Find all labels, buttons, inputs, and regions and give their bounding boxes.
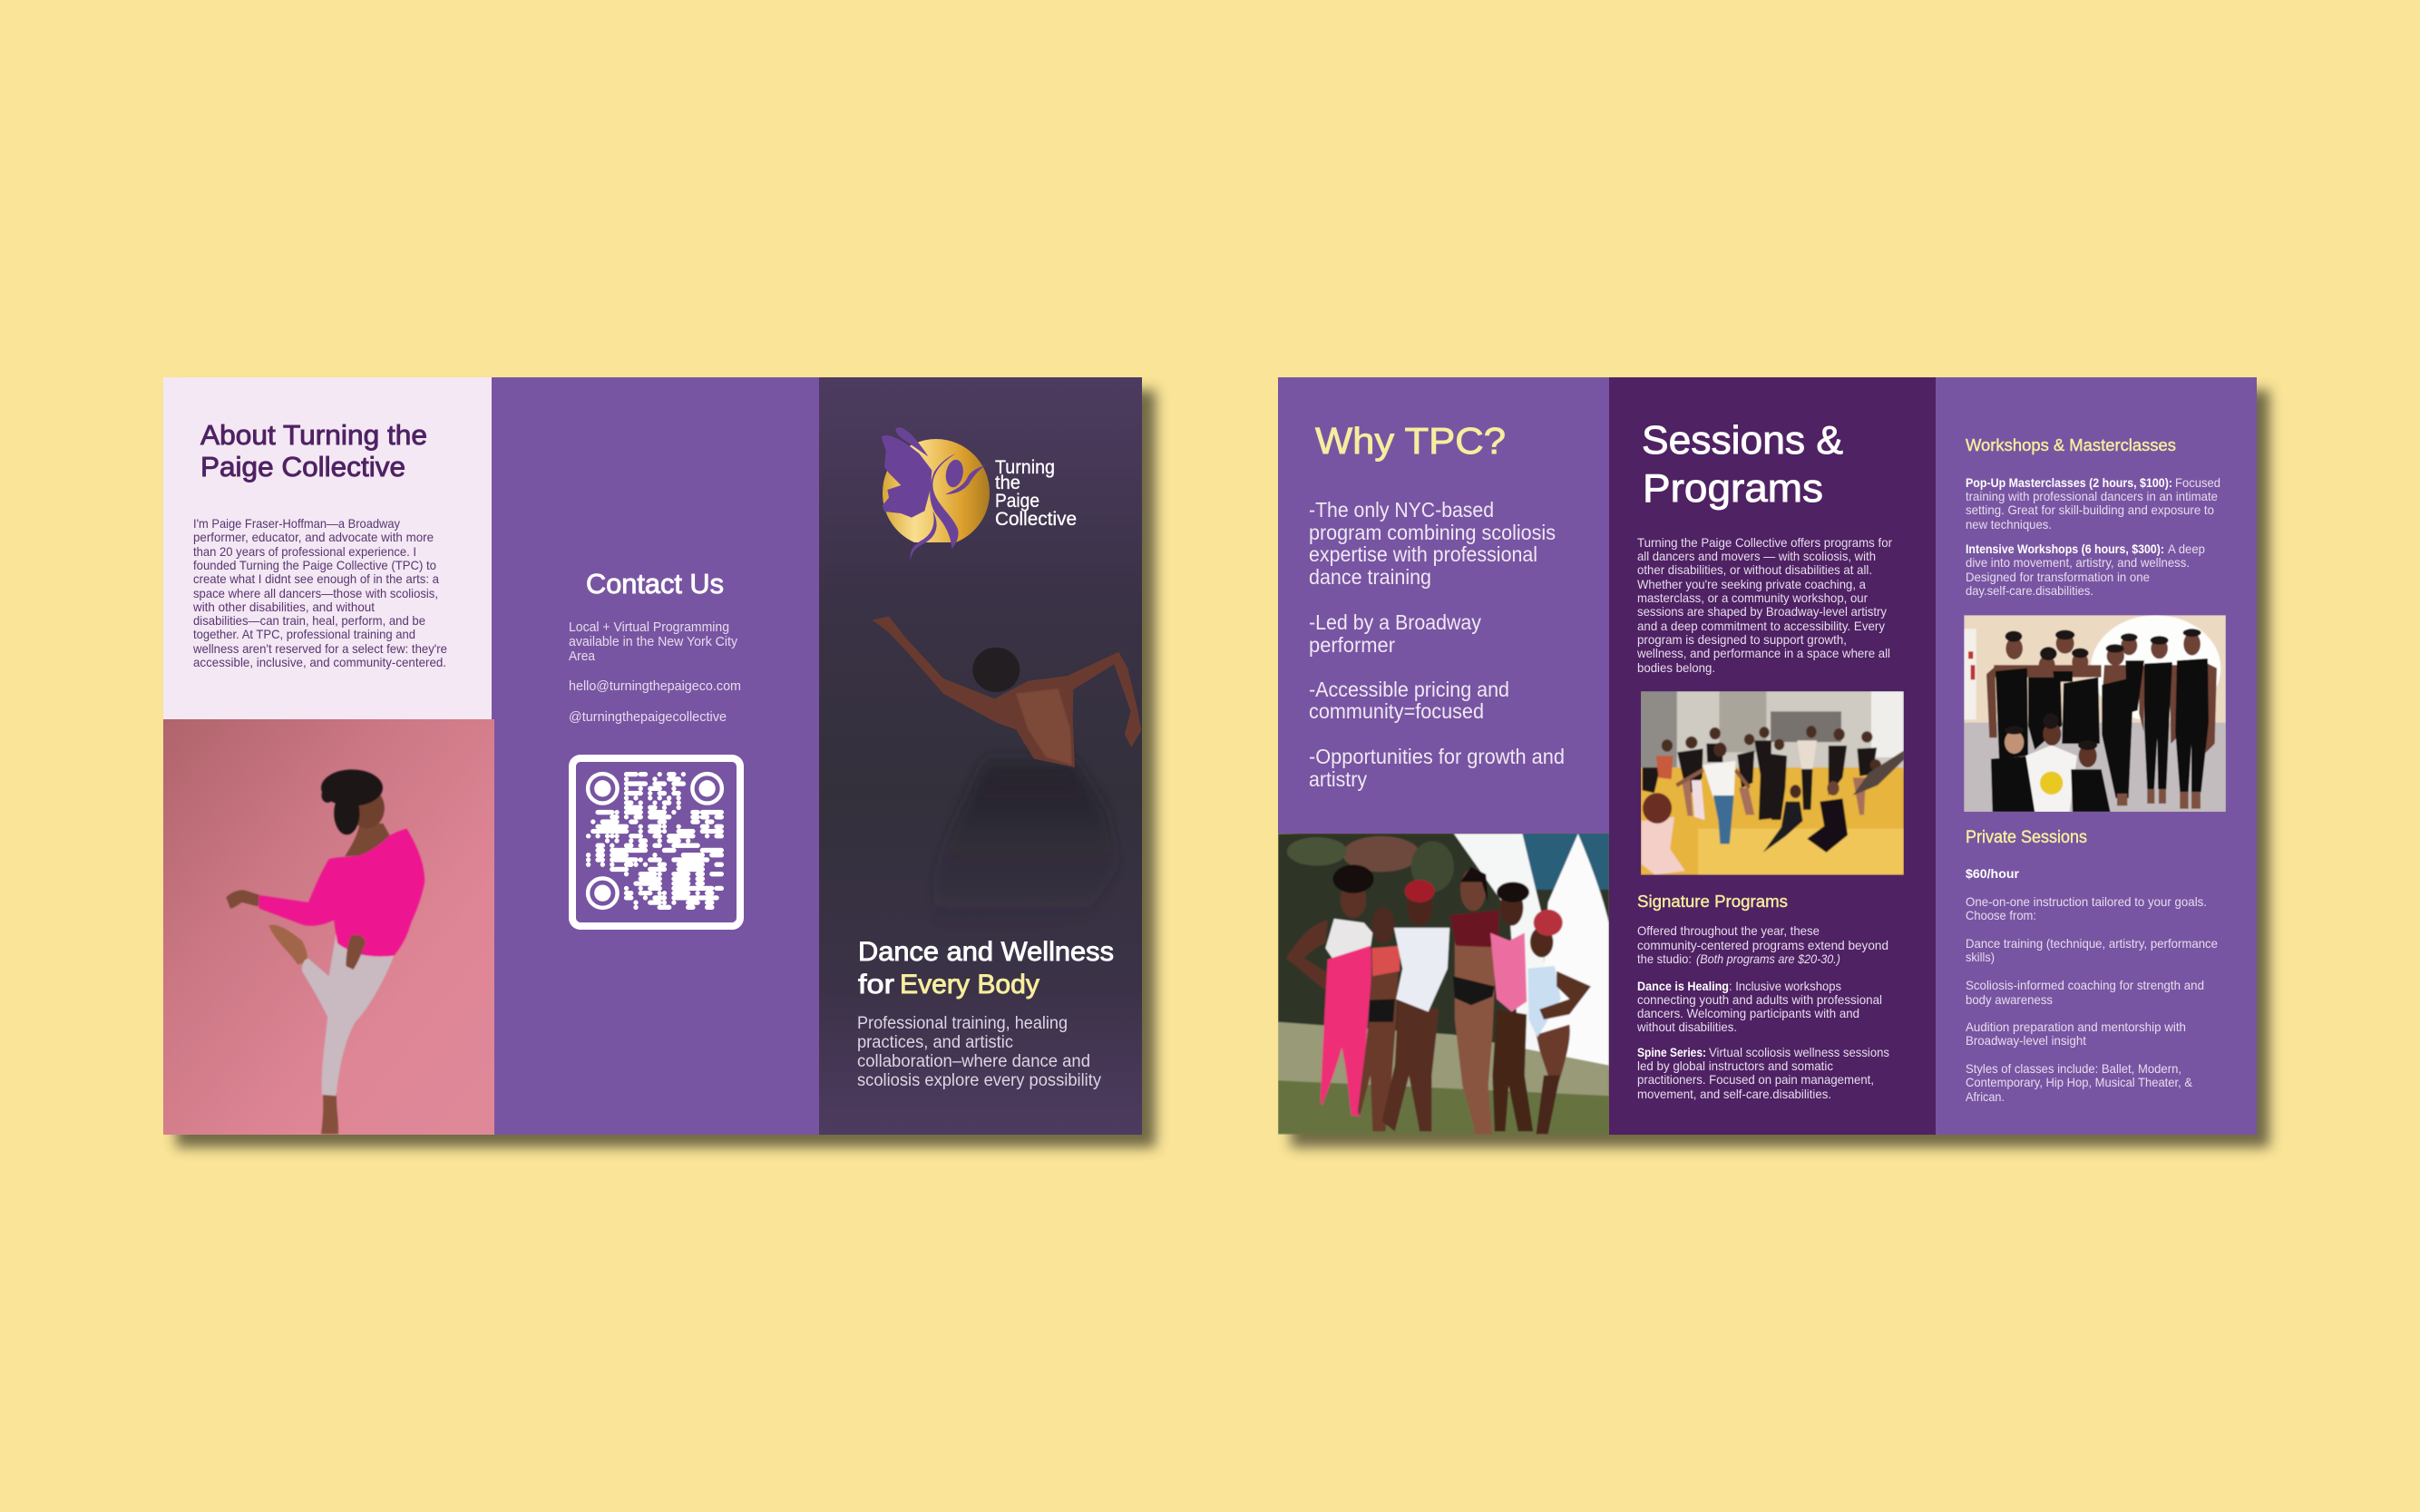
about text: with other disabilities, and without xyxy=(192,600,375,614)
logo wordmark: the xyxy=(995,473,1020,493)
floor xyxy=(1641,767,1904,875)
why TPC list: program combining scoliosis xyxy=(1309,521,1556,544)
sessions intro text: Whether you're seeking private coaching, a xyxy=(1637,577,1866,591)
workshops text: Intensive Workshops (6 hours, $300): xyxy=(1966,541,2164,556)
private sessions text: Broadway-level insight xyxy=(1966,1033,2086,1048)
heading: sessions and programs: Sessions & xyxy=(1642,418,1843,463)
sessions intro text: and a deep commitment to accessibility. Every xyxy=(1637,619,1885,633)
legs xyxy=(1682,777,1866,815)
cover text: collaboration–where dance and xyxy=(857,1052,1090,1071)
panel: about xyxy=(163,377,494,1135)
back row dancers xyxy=(1643,740,1877,820)
private sessions text: Dance training (technique, artistry, performance xyxy=(1966,936,2218,951)
private sessions text: African. xyxy=(1966,1089,2005,1104)
dancer 5 xyxy=(1490,882,1533,1131)
private sessions text: Audition preparation and mentorship with xyxy=(1966,1019,2186,1034)
photo: dancer in pink sweater xyxy=(163,719,494,1135)
why TPC list: -The only NYC-based xyxy=(1309,498,1494,522)
about text xyxy=(192,516,447,669)
why TPC list xyxy=(1309,498,1565,791)
raised hand xyxy=(226,890,259,909)
dancer 6 xyxy=(1528,910,1591,1134)
photo: studio group xyxy=(1641,691,1904,875)
heading: about: About Turning the xyxy=(200,419,427,451)
heading: why TPC: Why TPC? xyxy=(1315,420,1506,462)
why TPC list: dance training xyxy=(1309,565,1431,589)
contact details xyxy=(569,619,741,725)
contact details: available in the New York City xyxy=(569,634,737,649)
workshops text: Focused xyxy=(2175,475,2220,490)
signature programs text: Offered throughout the year, these xyxy=(1637,923,1820,938)
dancer 3 xyxy=(1382,880,1449,1131)
sessions intro text: wellness, and performance in a space where all xyxy=(1636,646,1890,660)
cover heading: Dance and Wellness xyxy=(858,937,1114,967)
private sessions text: skills) xyxy=(1966,950,1995,964)
panel: sessions and programs xyxy=(1609,377,1936,1135)
about text: performer, educator, and advocate with more xyxy=(193,530,434,544)
heads xyxy=(1662,726,1881,771)
sessions intro text: program is designed to support growth, xyxy=(1637,632,1847,647)
tutu xyxy=(961,759,1106,824)
dancer 1 xyxy=(1286,864,1374,1117)
heading: sessions and programs: Programs xyxy=(1643,466,1823,511)
seated dancer left xyxy=(1642,817,1685,875)
private sessions text: body awareness xyxy=(1966,992,2053,1007)
about text: I'm Paige Fraser-Hoffman—a Broadway xyxy=(193,516,400,531)
why TPC list: performer xyxy=(1309,633,1395,657)
about text: wellness aren't reserved for a select few: they're xyxy=(192,641,447,656)
standing dancers xyxy=(1996,658,2209,798)
trees and sky xyxy=(1278,834,1609,1043)
white tents xyxy=(1453,834,1545,1052)
heading: about: Paige Collective xyxy=(200,451,405,483)
contact details: @turningthepaigecollective xyxy=(569,709,727,725)
why TPC list: -Accessible pricing and xyxy=(1309,678,1509,701)
sessions intro text: masterclass, or a community workshop, our xyxy=(1637,590,1868,605)
hair xyxy=(972,648,1020,692)
why TPC list: -Led by a Broadway xyxy=(1309,610,1481,634)
panel: cover xyxy=(819,377,1142,1135)
grass xyxy=(1278,1021,1609,1097)
standing foot xyxy=(321,1093,338,1134)
panel: workshops and private sessions xyxy=(1936,377,2257,1135)
QR code xyxy=(572,758,740,926)
private sessions text: Contemporary, Hip Hop, Musical Theater, & xyxy=(1966,1075,2193,1089)
hair xyxy=(2005,629,2201,660)
sessions intro text: bodies belong. xyxy=(1637,660,1715,675)
drop shadow: outside spread xyxy=(176,390,1156,1147)
brochure: inside spread xyxy=(1278,377,2269,1147)
contact details: Area xyxy=(569,649,596,664)
cover heading: for xyxy=(858,970,894,1000)
signature programs text: led by global instructors and somatic xyxy=(1637,1058,1833,1073)
cover text: practices, and artistic xyxy=(857,1033,1013,1052)
sessions intro text: Turning the Paige Collective offers programs for xyxy=(1637,535,1892,550)
signature programs text: connecting youth and adults with professional xyxy=(1637,992,1882,1007)
signature programs text: dancers. Welcoming participants with and xyxy=(1637,1006,1859,1020)
arms and shoulders xyxy=(1986,664,2217,753)
cover text: scoliosis explore every possibility xyxy=(857,1071,1101,1090)
signature programs text: Virtual scoliosis wellness sessions xyxy=(1709,1045,1889,1059)
sweater xyxy=(257,828,424,957)
about text: together. At TPC, professional training and xyxy=(193,627,415,641)
workshops text: dive into movement, artistry, and wellness. xyxy=(1966,555,2190,570)
about text: create what I didnt see enough of in the arts: a xyxy=(193,571,439,586)
about text: than 20 years of professional experience. I xyxy=(193,544,416,559)
why TPC list: artistry xyxy=(1309,767,1367,791)
hair xyxy=(321,769,383,834)
heading: contact us: Contact Us xyxy=(586,568,724,600)
about text: disabilities—can train, heal, perform, and be xyxy=(193,613,425,628)
heading: about xyxy=(200,419,427,483)
signature programs text: the studio: xyxy=(1637,951,1692,966)
logo wordmark: Paige xyxy=(995,491,1039,512)
logo disc xyxy=(883,439,990,542)
signature programs text xyxy=(1636,923,1889,1101)
floor dancers right xyxy=(1763,802,1803,853)
signature programs text: movement, and self-care.disabilities. xyxy=(1637,1087,1831,1101)
wall xyxy=(1641,691,1904,773)
wall xyxy=(1964,615,2226,812)
workshops text xyxy=(1966,475,2220,598)
hand on thigh xyxy=(346,935,366,970)
dancer 2 xyxy=(1358,907,1400,1131)
faces xyxy=(2005,632,2200,675)
about text: founded Turning the Paige Collective (TPC) to xyxy=(193,558,436,572)
lifted foot xyxy=(268,925,307,964)
logo wordmark: Turning xyxy=(995,457,1055,478)
signature programs text: : Inclusive workshops xyxy=(1729,979,1841,993)
workshops text: Designed for transformation in one xyxy=(1966,570,2150,584)
workshops text: training with professional dancers in an intimate xyxy=(1966,489,2218,503)
contact details: Local + Virtual Programming xyxy=(569,619,729,635)
photo: studio portrait xyxy=(1964,615,2226,812)
about text: space where all dancers—those with scoliosis, xyxy=(193,586,438,600)
contact details: hello@turningthepaigeco.com xyxy=(569,678,741,694)
cover text: Professional training, healing xyxy=(857,1014,1068,1033)
private sessions text: $60/hour xyxy=(1966,866,2020,881)
panel: contact xyxy=(492,377,819,1135)
arms and torso xyxy=(873,616,1141,767)
private sessions text xyxy=(1966,866,2218,1104)
feet xyxy=(2117,789,2200,809)
heading: private sessions: Private Sessions xyxy=(1966,828,2087,847)
front dancer white shirt xyxy=(1703,761,1735,798)
cover heading xyxy=(858,937,1114,1000)
workshops text: A deep xyxy=(2168,541,2205,556)
private sessions text: Styles of classes include: Ballet, Modern, xyxy=(1966,1061,2181,1076)
sessions intro text: sessions are shaped by Broadway-level artistry xyxy=(1637,604,1887,619)
heading: workshops and masterclasses: Workshops & Masterclasses xyxy=(1966,435,2176,454)
private sessions text: Scoliosis-informed coaching for strength and xyxy=(1966,978,2204,992)
why TPC list: -Opportunities for growth and xyxy=(1309,745,1565,768)
logo wing and figure xyxy=(882,427,986,561)
heading: sessions and programs xyxy=(1642,418,1843,511)
brochure: outside spread xyxy=(163,377,1156,1147)
trousers xyxy=(302,933,394,1096)
sessions intro text xyxy=(1636,535,1892,675)
neck and chest xyxy=(345,824,390,856)
why TPC list: expertise with professional xyxy=(1309,542,1537,566)
sessions intro text: other disabilities, or without disabilities at all. xyxy=(1637,562,1872,577)
face xyxy=(357,795,385,827)
logo wordmark xyxy=(995,457,1077,530)
photo: six dancers outdoors xyxy=(1278,834,1609,1134)
about text: accessible, inclusive, and community-centered. xyxy=(193,655,446,669)
drop shadow: inside spread xyxy=(1291,390,2269,1147)
panel: why TPC xyxy=(1278,377,1609,1134)
signature programs text: community-centered programs extend beyond xyxy=(1637,938,1888,952)
signature programs text: without disabilities. xyxy=(1636,1019,1737,1034)
logo wordmark: Collective xyxy=(995,509,1077,530)
cover heading: Every Body xyxy=(900,970,1039,1000)
signature programs text: Dance is Healing xyxy=(1637,979,1729,993)
sessions intro text: all dancers and movers — with scoliosis, with xyxy=(1637,549,1876,563)
workshops text: Pop-Up Masterclasses (2 hours, $100): xyxy=(1966,475,2172,490)
private sessions text: One-on-one instruction tailored to your goals. xyxy=(1966,894,2207,909)
workshops text: setting. Great for skill-building and exposure to xyxy=(1966,502,2214,517)
why TPC list: community=focused xyxy=(1309,699,1484,723)
workshops text: new techniques. xyxy=(1966,517,2052,532)
cover text xyxy=(857,1014,1101,1090)
dancer 4 xyxy=(1449,867,1498,1134)
private sessions text: Choose from: xyxy=(1966,908,2036,922)
signature programs text: Spine Series: xyxy=(1637,1045,1706,1059)
floor xyxy=(1964,723,2226,812)
photo: dancer from behind xyxy=(873,617,1141,824)
signature programs text: practitioners. Focused on pain management, xyxy=(1637,1072,1874,1087)
workshops text: day.self-care.disabilities. xyxy=(1966,583,2093,598)
logo xyxy=(882,427,1077,561)
front row xyxy=(1991,756,2036,812)
heading: signature programs: Signature Programs xyxy=(1637,892,1788,911)
signature programs text: (Both programs are $20-30.) xyxy=(1696,951,1840,966)
